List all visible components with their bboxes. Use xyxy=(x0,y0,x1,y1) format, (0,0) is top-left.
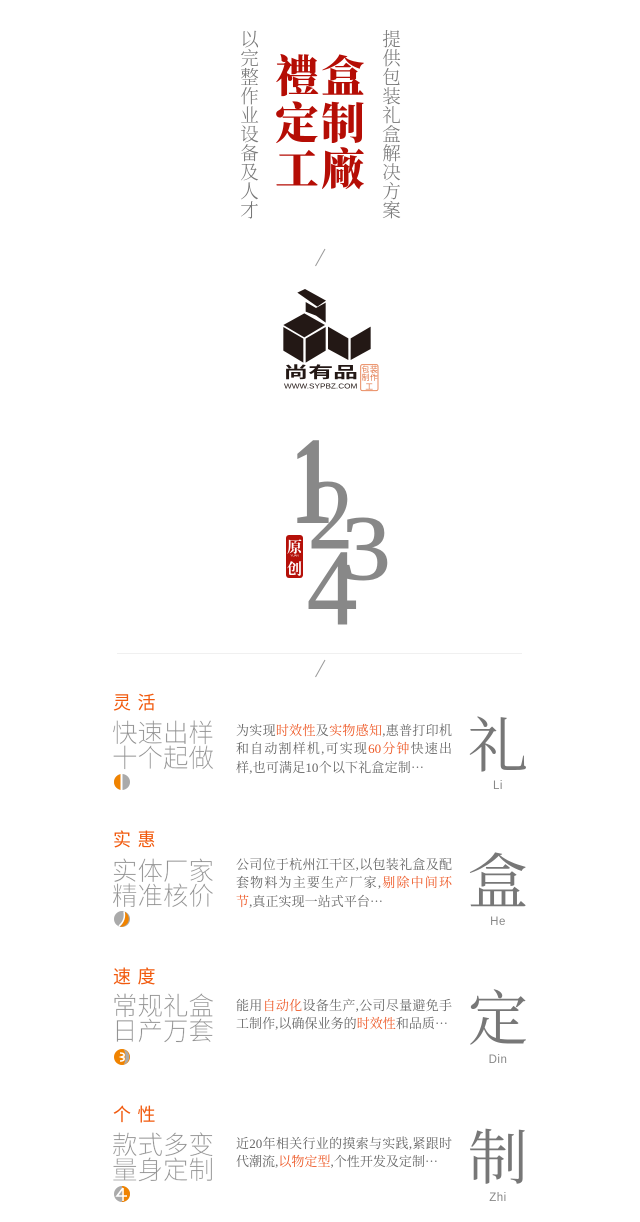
slash marker top xyxy=(315,248,326,266)
body text: 代潮流,以物定型,个性开发及定制⋯ xyxy=(236,1154,438,1169)
body text: 套物料为主要生产厂家,剔除中间环 xyxy=(236,875,452,890)
heading: 个性 xyxy=(113,1105,162,1125)
pinyin: Li xyxy=(493,780,503,792)
pinyin: He xyxy=(490,916,506,928)
subheading xyxy=(112,1132,214,1184)
large character: 盒 xyxy=(468,850,528,916)
logo: box mark and wordmark: 装 xyxy=(370,364,378,375)
large character: 制 xyxy=(468,1126,528,1192)
divider xyxy=(117,653,522,654)
subheading: 常规礼盒 xyxy=(112,993,214,1021)
pinyin: Zhi xyxy=(489,1192,507,1204)
logo: box mark and wordmark xyxy=(283,289,378,392)
subheading xyxy=(112,858,214,910)
body text xyxy=(236,723,452,775)
heading: 速度 xyxy=(113,967,162,987)
subheading: 日产万套 xyxy=(112,1018,214,1046)
subheading: 款式多变 xyxy=(112,1132,214,1160)
body text xyxy=(236,857,452,909)
subheading xyxy=(112,720,214,772)
icon: number 1 xyxy=(114,774,130,790)
logo: box mark and wordmark: 尚有品 xyxy=(283,360,358,382)
red seal: original xyxy=(286,535,303,578)
pinyin: Din xyxy=(489,1054,507,1066)
body text: 能用自动化设备生产,公司尽量避免手 xyxy=(236,998,452,1013)
red seal: original: 原 xyxy=(287,536,303,557)
icon: number 4 xyxy=(114,1186,130,1202)
logo: box mark and wordmark: 工 xyxy=(365,381,373,392)
heading: 灵活 xyxy=(113,693,162,713)
slash marker middle xyxy=(315,660,326,678)
tagline: right column: 提供包装礼盒解决方案 xyxy=(382,31,401,222)
subheading: 快速出样 xyxy=(112,720,214,748)
logo: box mark and wordmark: WWW.SYPBZ.COM xyxy=(284,382,357,391)
icon: number 3 xyxy=(114,1049,130,1065)
title: left column: 禮定工 xyxy=(275,54,319,195)
title: right column: 盒制廠 xyxy=(321,54,365,195)
numerals 1 2 3 4 graphic xyxy=(290,430,391,630)
numerals 1 2 3 4 graphic: 2 xyxy=(308,459,353,570)
subheading: 量身定制 xyxy=(112,1156,214,1184)
subheading: 实体厂家 xyxy=(112,858,214,886)
body text: 和自动割样机,可实现60分钟快速出 xyxy=(236,741,452,756)
large character: 定 xyxy=(468,987,528,1053)
numerals 1 2 3 4 graphic: 3 xyxy=(341,497,391,599)
red seal: original: YUAN xyxy=(290,554,299,558)
logo: box mark and wordmark: 制 xyxy=(362,372,370,383)
body text: 公司位于杭州江干区,以包装礼盒及配 xyxy=(236,857,452,872)
large character: 礼 xyxy=(468,714,528,780)
icon: number 2 xyxy=(114,911,130,927)
body text: 近20年相关行业的摸索与实践,紧跟时 xyxy=(236,1136,452,1151)
panel: section 2 xyxy=(112,830,528,928)
subheading xyxy=(112,993,214,1046)
panel: section 3 xyxy=(112,967,528,1066)
body text: 节,真正实现一站式平台⋯ xyxy=(236,894,383,909)
heading: 实惠 xyxy=(113,830,162,850)
body text: 样,也可满足10个以下礼盒定制⋯ xyxy=(236,760,424,775)
subheading: 精准核价 xyxy=(112,882,214,910)
body text: 工制作,以确保业务的时效性和品质⋯ xyxy=(236,1016,448,1031)
panel: section 1 xyxy=(112,693,528,792)
body text xyxy=(236,998,452,1031)
tagline: left column: 以完整作业设备及人才 xyxy=(240,31,259,222)
body text: 为实现时效性及实物感知,惠普打印机 xyxy=(236,723,452,738)
body text xyxy=(236,1136,452,1169)
logo: box mark and wordmark: 包 xyxy=(362,364,370,375)
subheading: 十个起做 xyxy=(112,744,214,772)
panel: section 4 xyxy=(112,1105,528,1204)
logo: box mark and wordmark: 作 xyxy=(370,372,378,383)
